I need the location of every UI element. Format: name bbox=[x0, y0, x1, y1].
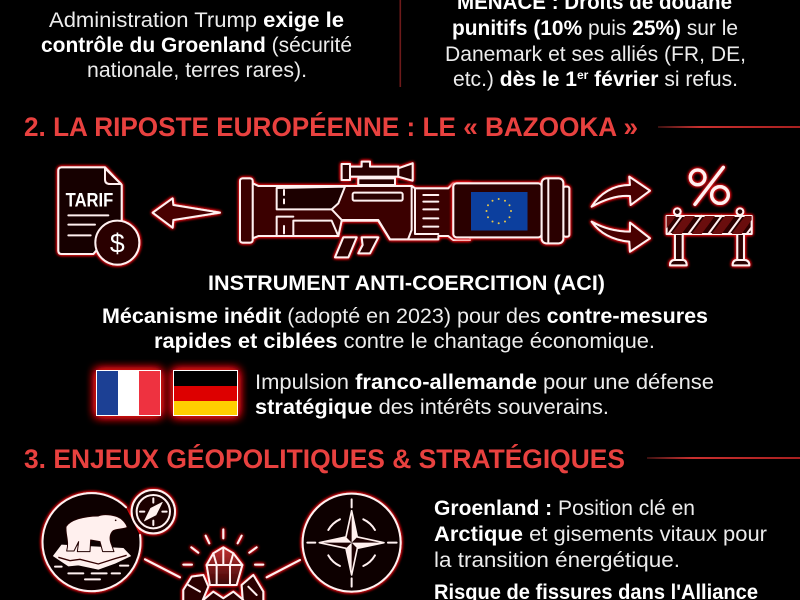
text block: Groenland et risque bbox=[434, 497, 767, 600]
icon: crystals bbox=[183, 529, 263, 600]
text block: menace de droits de douane: février bbox=[588, 68, 659, 91]
ice floe bbox=[53, 545, 131, 569]
icon: NATO star bbox=[303, 494, 401, 592]
bazooka front tube bbox=[453, 178, 569, 243]
bear bbox=[66, 515, 127, 552]
text block: exigence américaine: nationale, terres rares). bbox=[87, 59, 307, 82]
icon: tarif document with dollar coin bbox=[58, 167, 139, 265]
heading: section 2: 2. LA RIPOSTE EUROPÉENNE : LE « BAZOOKA » bbox=[24, 111, 638, 142]
text block: mécanisme bbox=[102, 305, 708, 353]
text block: menace de droits de douane bbox=[445, 0, 746, 91]
text block: mécanisme: Mécanisme inédit (adopté en 2023) pour des contre-mesures bbox=[102, 305, 708, 328]
arrow: toward tarif bbox=[153, 198, 220, 228]
heading: section 3: 3. ENJEUX GÉOPOLITIQUES & STRATÉGIQUES bbox=[24, 443, 625, 474]
arrows: toward barrier bbox=[592, 177, 650, 252]
text block: menace de droits de douane: er bbox=[577, 68, 589, 82]
column divider bbox=[400, 0, 401, 87]
bazooka rear and body bbox=[240, 162, 470, 257]
text block: Groenland et risque: la transition énergétique. bbox=[434, 549, 680, 572]
text block: Groenland et risque: Arctique et gisements vitaux pour bbox=[434, 523, 767, 546]
text block: menace de droits de douane: si refus. bbox=[664, 68, 738, 91]
text block: impulsion franco-allemande bbox=[255, 371, 714, 419]
icon: bazooka with EU flag bbox=[240, 162, 569, 257]
EU flag bbox=[471, 192, 528, 230]
text block: impulsion franco-allemande: Impulsion franco-allemande pour une défense bbox=[255, 371, 714, 394]
icon: percent on barrier bbox=[667, 167, 752, 265]
connector lines bbox=[145, 559, 300, 577]
icon: polar bear on ice with compass bbox=[43, 490, 175, 591]
text block: exigence américaine bbox=[41, 9, 352, 82]
icon: tarif document with dollar coin: TARIF bbox=[66, 191, 113, 212]
subheading: instrument anti-coercition: INSTRUMENT ANTI-COERCITION (ACI) bbox=[208, 272, 605, 295]
icon: tarif document with dollar coin: $ bbox=[110, 228, 125, 258]
text block: menace de droits de douane: punitifs (10% puis 25%) sur le bbox=[452, 17, 738, 40]
text block: mécanisme: rapides et ciblées contre le chantage économique. bbox=[154, 330, 655, 353]
text block: menace de droits de douane: etc.) dès le 1 bbox=[453, 68, 577, 91]
icon: German flag bbox=[173, 370, 238, 416]
text block: menace de droits de douane: Danemark et ses alliés (FR, DE, bbox=[445, 43, 746, 66]
text block: Groenland et risque: Groenland : Position clé en bbox=[434, 497, 695, 520]
icon: French flag bbox=[96, 370, 161, 416]
text block: exigence américaine: contrôle du Groenland (sécurité bbox=[41, 34, 352, 57]
text block: exigence américaine: Administration Trump exige le bbox=[49, 9, 344, 32]
text block: impulsion franco-allemande: stratégique des intérêts souverains. bbox=[255, 396, 609, 419]
